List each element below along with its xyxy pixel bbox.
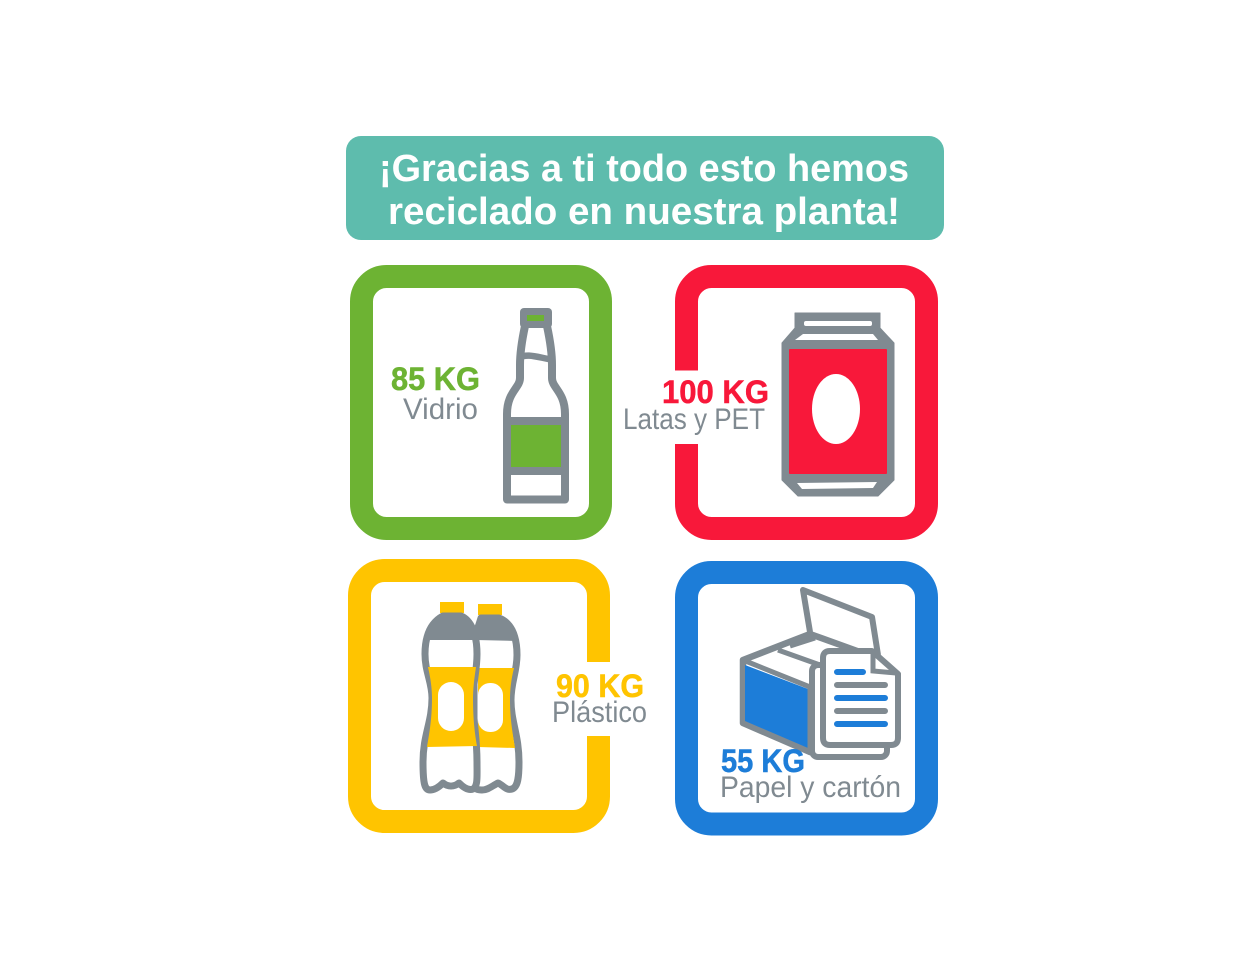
panel: papel y cartón [686,572,926,824]
title banner [346,136,944,240]
panel: plástico [360,570,647,822]
yellow frame [360,570,598,822]
label: 55 KG Papel y cartón: Papel y cartón [720,771,901,804]
label: 100 KG Latas y PET: 100 KG [662,374,769,410]
icon: can [782,313,894,496]
red frame [686,276,926,528]
label: 100 KG Latas y PET: Latas y PET [623,403,765,436]
icon: box and papers [743,590,898,757]
label: 90 KG Plástico: 90 KG [556,668,644,704]
label: 90 KG Plástico: Plástico [552,696,647,729]
title banner: reciclado en nuestra planta! [388,191,900,233]
panel: vidrio [362,276,600,528]
label: 85 KG Vidrio: 85 KG [391,361,480,397]
label: 90 KG Plástico [552,668,647,729]
icon: glass bottle [505,308,567,500]
title banner: ¡Gracias a ti todo esto hemos [379,148,909,190]
label: 55 KG Papel y cartón: 55 KG [721,743,805,779]
label: 85 KG Vidrio [391,361,480,426]
label: 100 KG Latas y PET [623,374,769,436]
green frame [362,276,600,528]
label: 55 KG Papel y cartón [720,743,901,804]
label: 85 KG Vidrio: Vidrio [403,393,478,426]
blue frame [686,572,926,824]
panel: latas y PET [623,276,926,528]
icon: plastic bottles [423,602,519,790]
